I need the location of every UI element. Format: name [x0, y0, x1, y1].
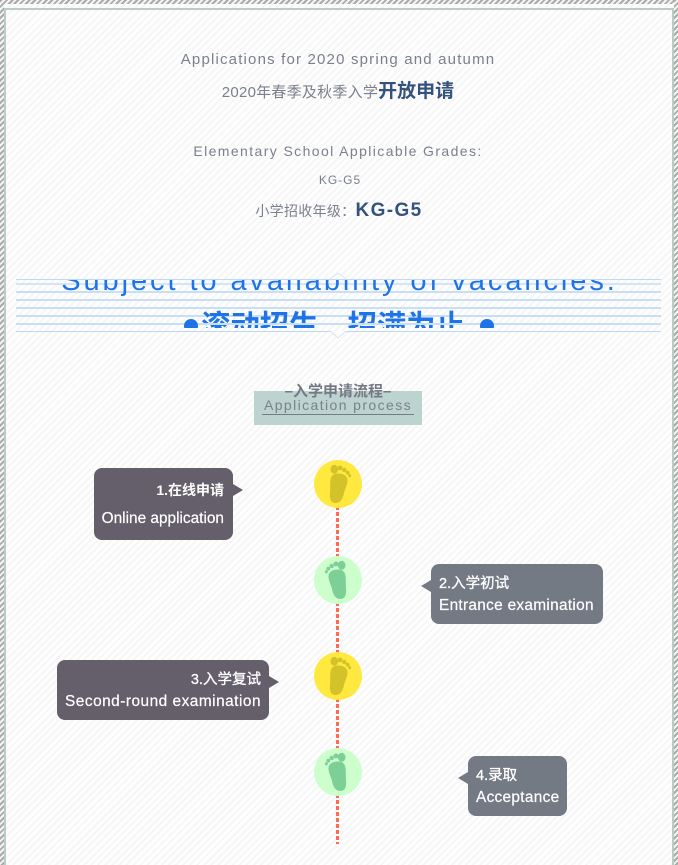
callout: step 2 entrance examination: 2.入学初试 — [439, 576, 509, 592]
heading background — [254, 391, 422, 425]
text: grades: KG-G5 — [319, 173, 361, 187]
callout: step 4 acceptance — [468, 756, 567, 816]
callout: step 1 online application: 1.在线申请 — [156, 482, 224, 498]
icon: footprint 1 — [314, 460, 362, 508]
callout: step 1 online application: Online application — [102, 510, 224, 527]
text: applicable grades English: Elementary School Applicable Grades: — [193, 143, 483, 159]
callout: step 3 second-round examination — [57, 660, 269, 720]
callout: step 4 acceptance: Acceptance — [476, 789, 559, 806]
heading English: Application process — [264, 397, 412, 413]
callout: step 1 online application — [94, 468, 233, 540]
banner bullets — [184, 319, 494, 328]
callout: step 2 entrance examination: Entrance examination — [439, 597, 594, 614]
timeline: dotted line — [336, 506, 339, 844]
callout: step 2 entrance examination — [431, 564, 603, 624]
heading: applications English: Applications for 2020 spring and autumn — [181, 51, 495, 68]
icon: footprint 2 — [314, 556, 362, 604]
section heading: application process — [254, 383, 422, 425]
callout: step 3 second-round examination: 3.入学复试 — [191, 672, 261, 688]
callout: step 4 acceptance: 4.录取 — [476, 768, 517, 784]
heading Chinese: –入学申请流程– — [285, 383, 391, 400]
callout: step 3 second-round examination: Second-round examination — [65, 693, 261, 710]
heading: applications Chinese: 2020年春季及秋季入学开放申请 — [222, 81, 454, 102]
icon: footprint 3 — [314, 652, 362, 700]
icon: footprint 4 — [314, 748, 362, 796]
text: grades Chinese: 小学招收年级：KG-G5 — [255, 200, 423, 221]
banner: subject to availability of vacancies — [16, 273, 661, 338]
